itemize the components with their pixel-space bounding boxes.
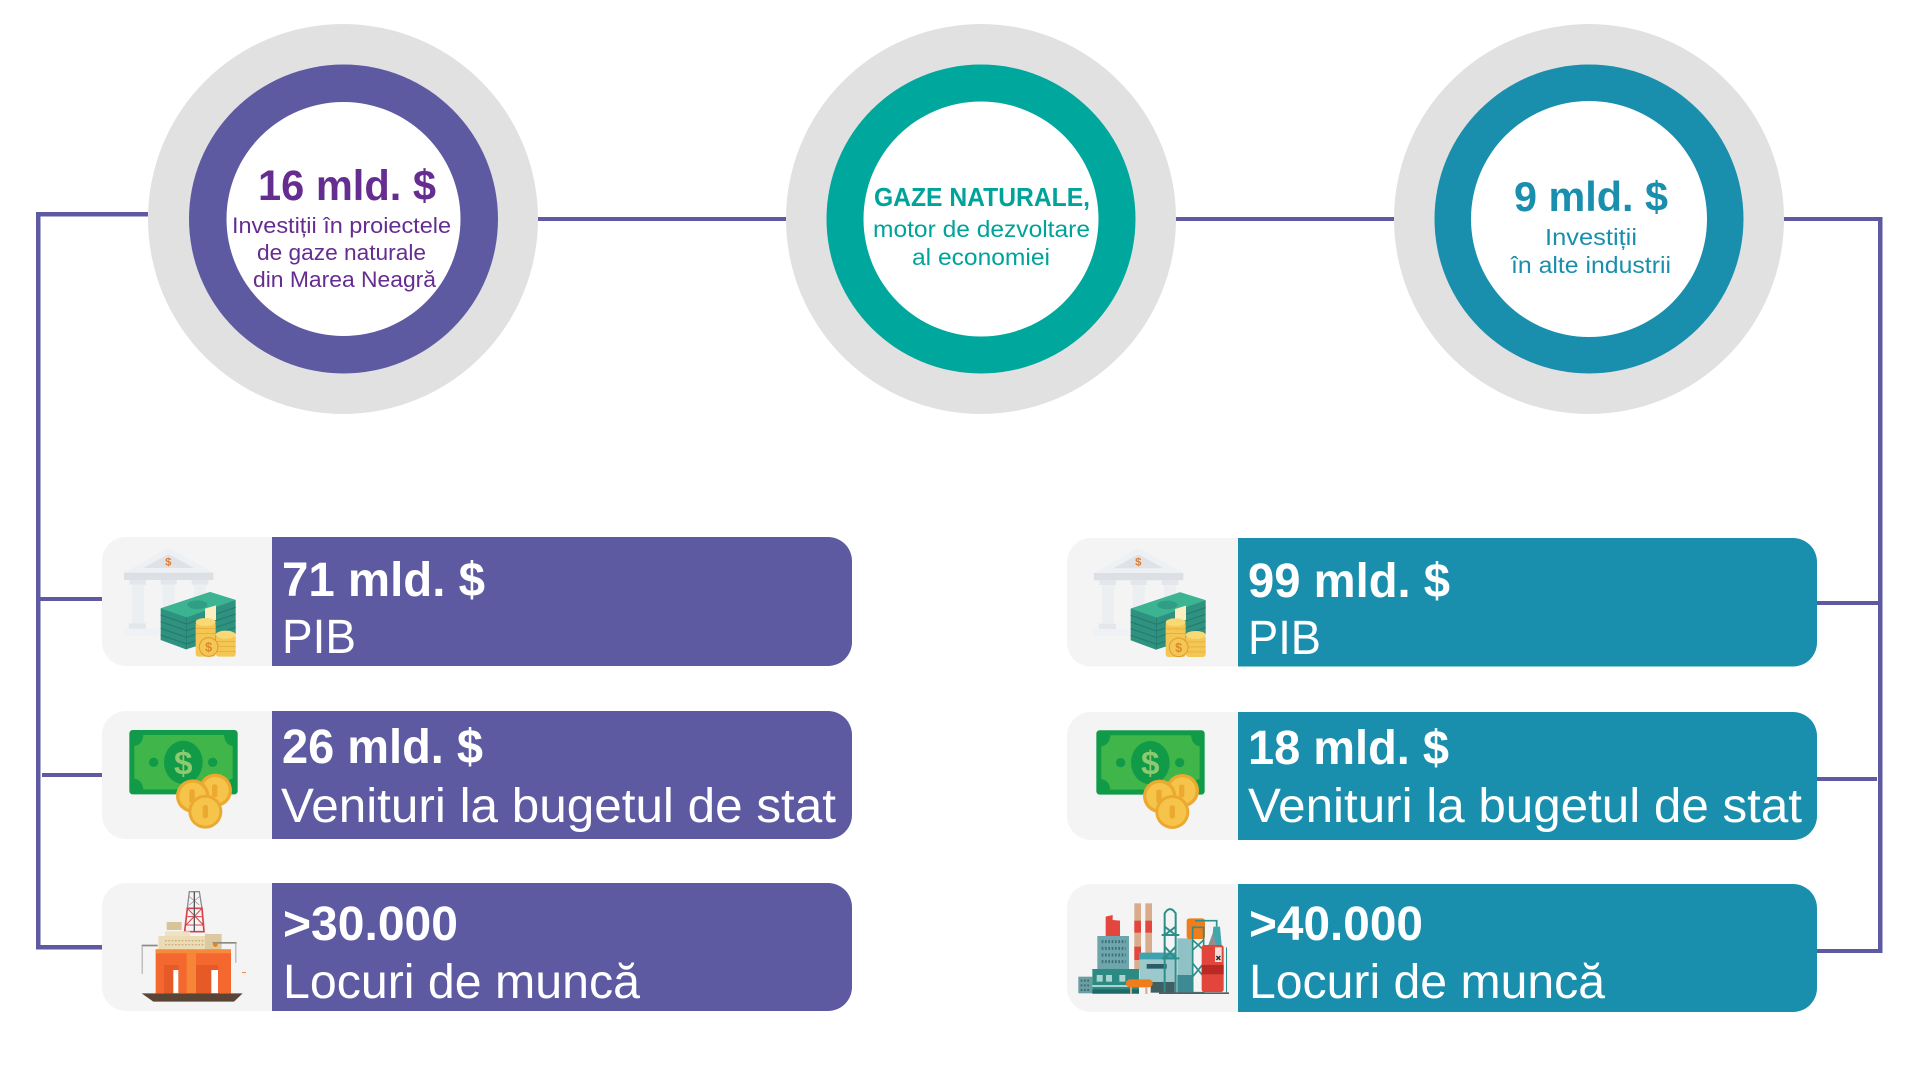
circle text: other industries: Investiții <box>1545 224 1637 250</box>
icon: bank and money <box>123 547 236 657</box>
icon: banknote and coins: $ <box>174 745 193 782</box>
icon: bank and money: $ <box>1135 557 1142 569</box>
bar text: 26 mld. $ Venituri la bugetul de stat: Venituri la bugetul de stat <box>281 780 836 833</box>
bar text: >40.000 Locuri de muncă: >40.000 <box>1249 898 1423 951</box>
row: left budget revenue <box>102 711 852 839</box>
icon: banknote and coins <box>1096 730 1205 829</box>
row: left jobs <box>102 883 852 1011</box>
circle text: other industries: în alte industrii <box>1510 252 1671 278</box>
circle: 16 mld. $ investment in natural gas <box>148 24 538 414</box>
bar text: 71 mld. $ PIB: 71 mld. $ <box>282 554 485 607</box>
circle text: natural gas investment: Investiții în proiectele <box>232 213 451 238</box>
row: right GDP <box>1067 538 1817 666</box>
bar text: 99 mld. $ PIB: PIB <box>1248 612 1321 665</box>
row: right budget revenue <box>1067 712 1817 840</box>
bar text: 18 mld. $ Venituri la bugetul de stat: 18 mld. $ <box>1248 722 1449 775</box>
bar text: >40.000 Locuri de muncă <box>1249 898 1605 1009</box>
connector lines <box>36 212 1882 953</box>
bar text: 99 mld. $ PIB <box>1248 555 1450 665</box>
icon: bank and money <box>1093 548 1206 657</box>
icon: banknote and coins: $ <box>1141 746 1160 783</box>
circle text: natural gas <box>873 184 1090 270</box>
circle text: natural gas investment <box>232 162 451 292</box>
bar text: >30.000 Locuri de muncă <box>283 898 640 1009</box>
circle text: natural gas: GAZE NATURALE, <box>874 184 1090 212</box>
row: left GDP <box>102 537 852 666</box>
bar text: 99 mld. $ PIB: 99 mld. $ <box>1248 555 1450 608</box>
circle text: other industries <box>1510 173 1671 278</box>
circle text: natural gas investment: din Marea Neagră <box>253 267 436 292</box>
bar text: 18 mld. $ Venituri la bugetul de stat: Venituri la bugetul de stat <box>1248 780 1802 833</box>
icon: banknote and coins <box>129 730 238 829</box>
circle: natural gas, engine of economic development <box>786 24 1176 414</box>
circle text: other industries: 9 mld. $ <box>1514 173 1668 220</box>
icon: industrial plant <box>1078 903 1229 994</box>
circle text: natural gas: motor de dezvoltare <box>873 216 1090 242</box>
icon: offshore oil rig <box>142 892 246 1002</box>
row: right jobs <box>1067 884 1817 1012</box>
bar text: >30.000 Locuri de muncă: Locuri de muncă <box>283 956 640 1009</box>
bar text: >40.000 Locuri de muncă: Locuri de muncă <box>1249 956 1605 1009</box>
bar text: >30.000 Locuri de muncă: >30.000 <box>283 898 458 951</box>
icon: bank and money: $ <box>205 641 212 655</box>
bar text: 26 mld. $ Venituri la bugetul de stat: 26 mld. $ <box>282 721 483 774</box>
circle text: natural gas investment: 16 mld. $ <box>258 162 436 210</box>
circle text: natural gas investment: de gaze naturale <box>257 240 426 265</box>
circle: 9 mld. $ investment in other industries <box>1394 24 1784 414</box>
bar text: 18 mld. $ Venituri la bugetul de stat <box>1248 722 1802 833</box>
icon: bank and money: $ <box>165 556 172 568</box>
bar text: 71 mld. $ PIB: PIB <box>282 611 356 664</box>
bar text: 71 mld. $ PIB <box>282 554 485 664</box>
icon: bank and money: $ <box>1175 641 1182 655</box>
bar text: 26 mld. $ Venituri la bugetul de stat <box>281 721 836 833</box>
circle text: natural gas: al economiei <box>912 244 1050 270</box>
